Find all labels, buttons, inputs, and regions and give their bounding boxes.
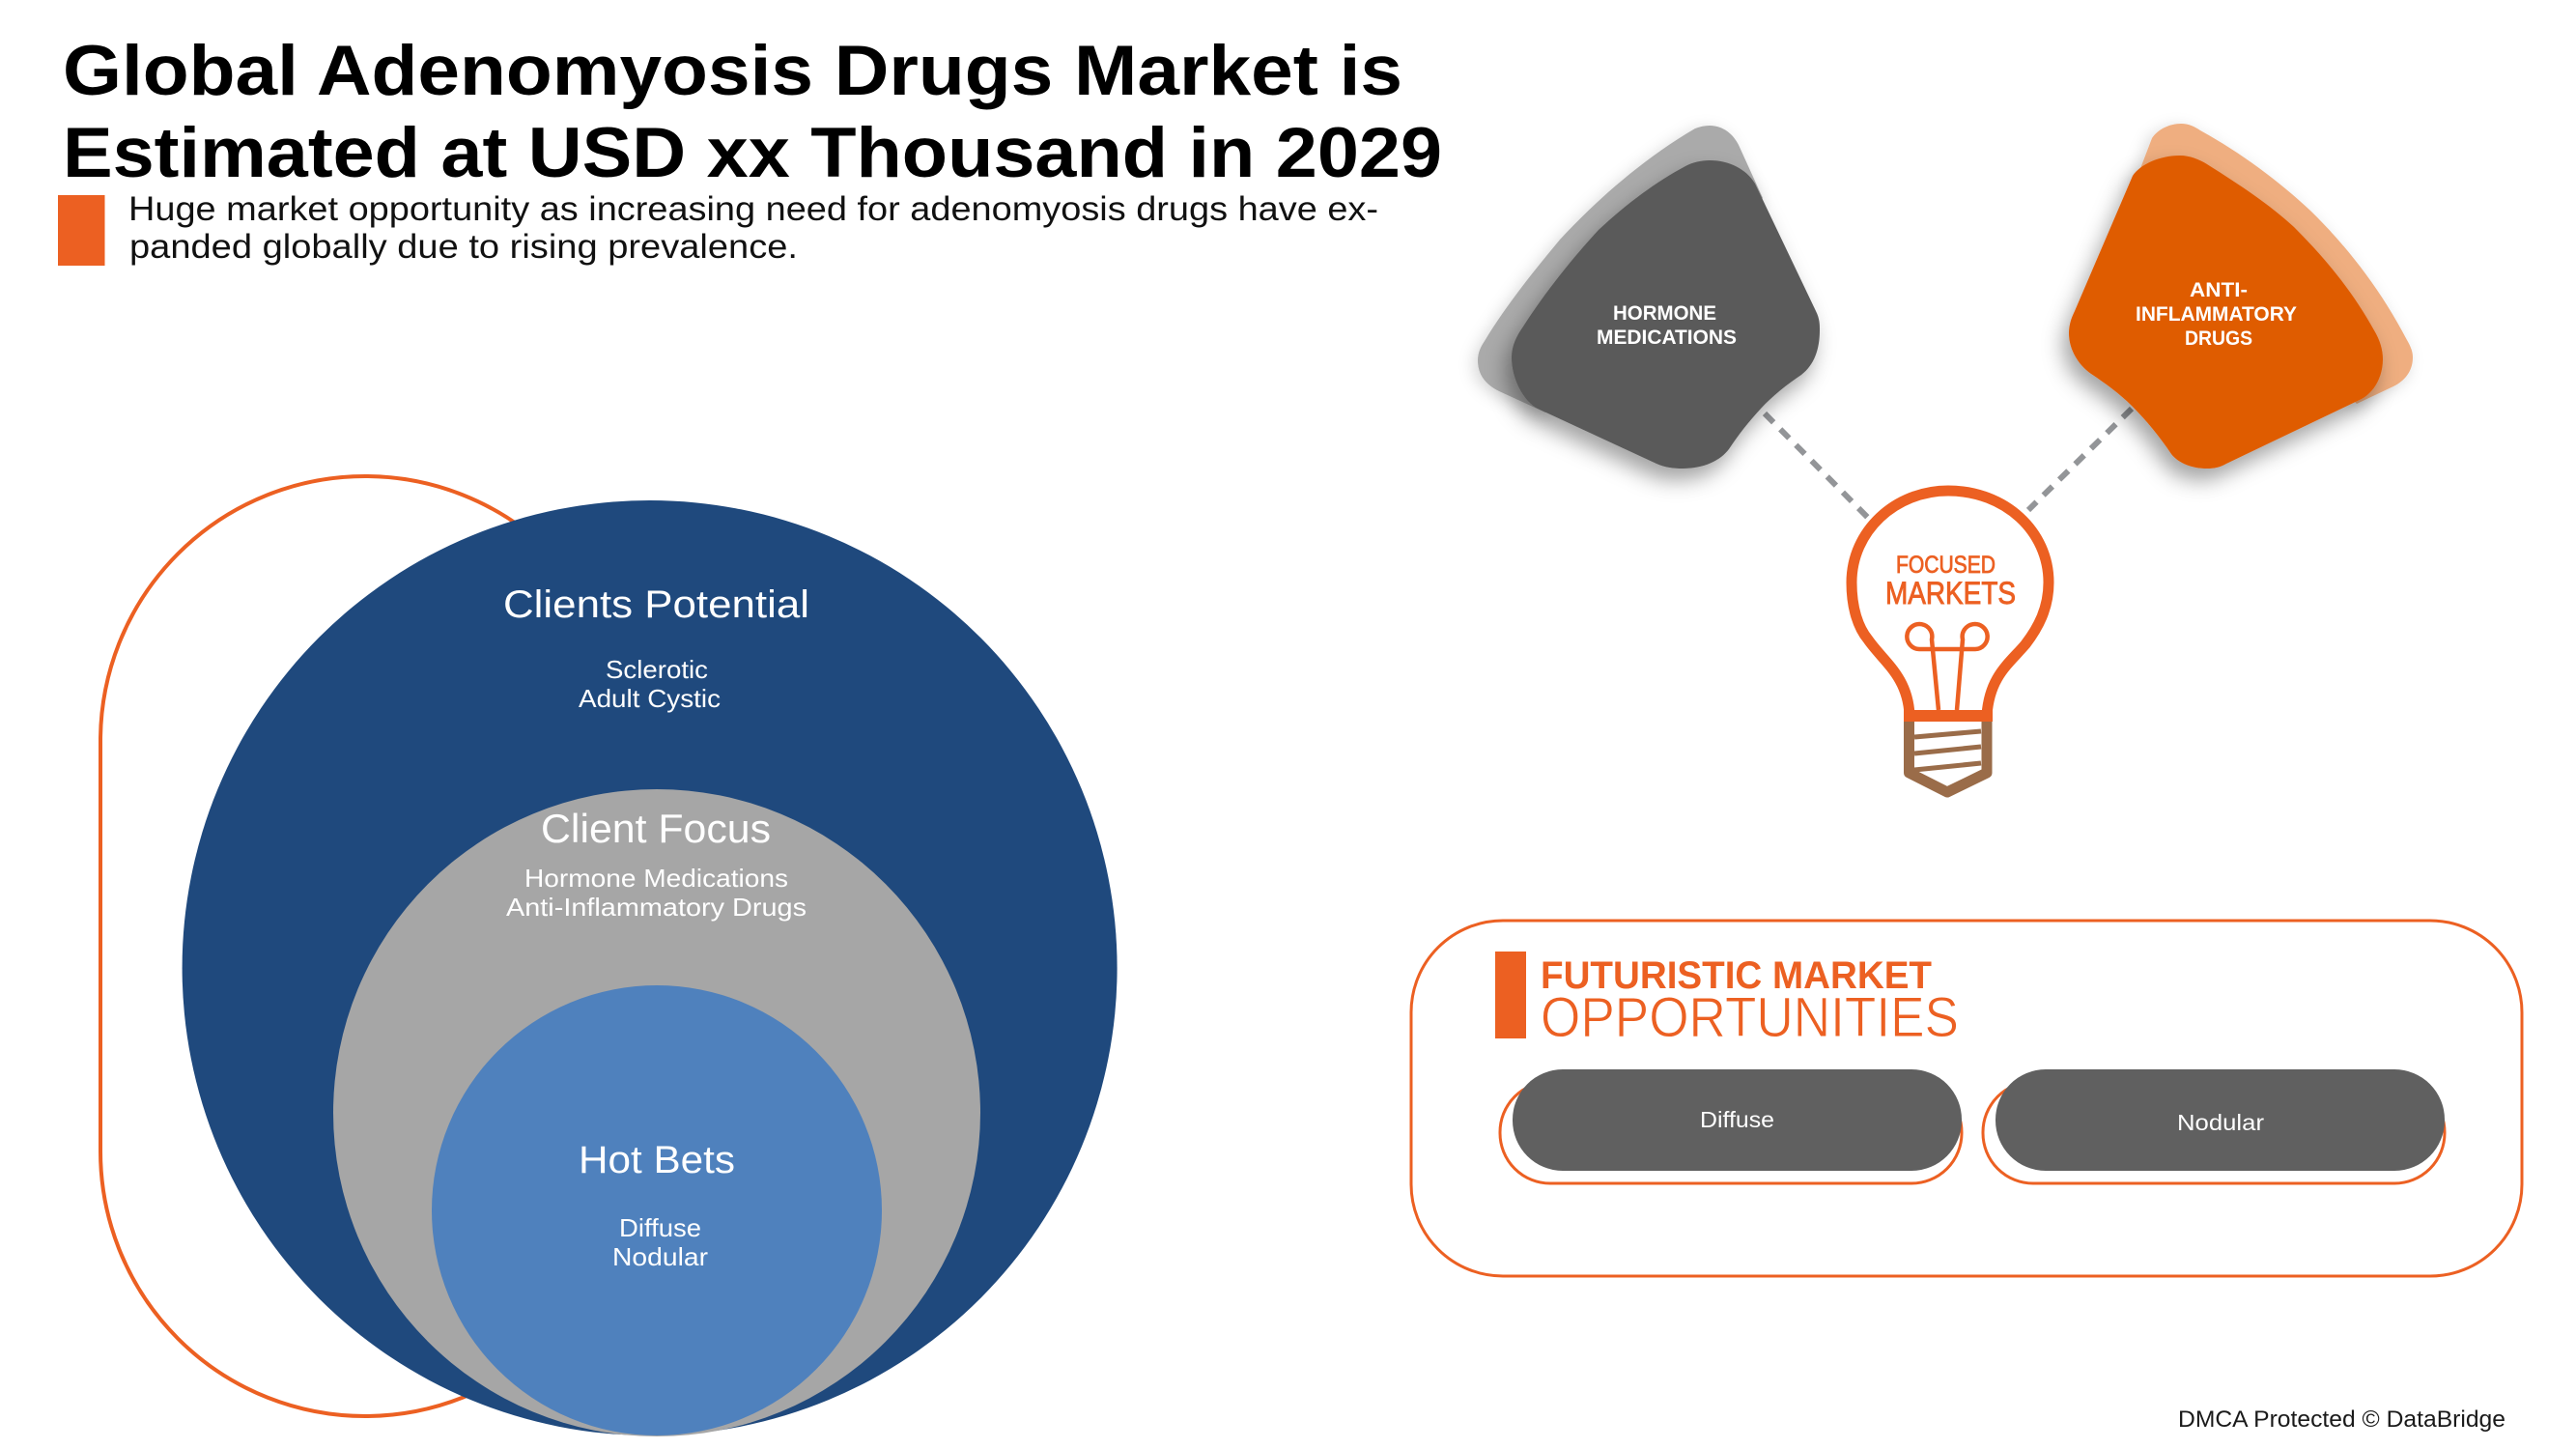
pill: nodular: Nodular bbox=[2177, 1110, 2264, 1135]
circle: client focus: Anti-Inflammatory Drugs bbox=[506, 893, 807, 922]
circle: hot bets: Diffuse bbox=[619, 1213, 701, 1242]
icon: light bulb focused markets bbox=[1852, 491, 2049, 792]
circle: hot bets bbox=[432, 985, 882, 1435]
circle: hot bets: Nodular bbox=[612, 1242, 708, 1271]
heading marker bbox=[1495, 952, 1526, 1038]
pill: diffuse: Diffuse bbox=[1700, 1107, 1774, 1132]
orange pill outline bbox=[100, 476, 630, 1416]
title: Estimated at USD xx Thousand in 2029 bbox=[63, 114, 1442, 192]
circle: client focus: Hormone Medications bbox=[524, 864, 788, 893]
blob: anti-inflammatory drugs bbox=[2069, 124, 2413, 469]
title bbox=[63, 32, 1442, 192]
footer credit: DMCA Protected © DataBridge bbox=[2178, 1406, 2505, 1433]
venn diagram: market circles bbox=[100, 476, 1118, 1436]
circle: client focus bbox=[333, 789, 980, 1436]
heading: FUTURISTIC MARKET bbox=[1541, 954, 1932, 997]
blob: anti-inflammatory drugs: ANTI- bbox=[2190, 279, 2248, 301]
icon: light bulb focused markets: MARKETS bbox=[1885, 576, 2016, 611]
blob: hormone medications bbox=[1478, 126, 1820, 469]
circle: client focus: Client Focus bbox=[541, 806, 771, 851]
heading bbox=[1541, 954, 1959, 1049]
panel: futuristic market opportunities bbox=[1411, 921, 2522, 1276]
circle: clients potential: Clients Potential bbox=[503, 583, 809, 626]
subtitle: Huge market opportunity as increasing need for adenomyosis drugs have ex- bbox=[128, 190, 1378, 228]
circle: hot bets: Hot Bets bbox=[579, 1139, 735, 1181]
blob: hormone medications: HORMONE bbox=[1613, 302, 1716, 325]
circle: clients potential: Adult Cystic bbox=[579, 684, 721, 713]
subtitle bbox=[128, 190, 1378, 266]
heading: OPPORTUNITIES bbox=[1541, 986, 1959, 1049]
blob: anti-inflammatory drugs: INFLAMMATORY bbox=[2136, 303, 2297, 326]
icon: light bulb focused markets: FOCUSED bbox=[1896, 552, 1996, 579]
circle: clients potential bbox=[183, 500, 1118, 1435]
subtitle: panded globally due to rising prevalence. bbox=[129, 228, 798, 266]
blob: hormone medications: MEDICATIONS bbox=[1597, 327, 1737, 349]
pill: nodular bbox=[1983, 1069, 2445, 1183]
title: Global Adenomyosis Drugs Market is bbox=[63, 32, 1402, 110]
blob: anti-inflammatory drugs: DRUGS bbox=[2185, 327, 2252, 350]
dashed connectors bbox=[1765, 409, 2132, 519]
subtitle marker bbox=[58, 195, 104, 266]
circle: clients potential: Sclerotic bbox=[606, 655, 708, 684]
pill: diffuse bbox=[1500, 1069, 1962, 1183]
